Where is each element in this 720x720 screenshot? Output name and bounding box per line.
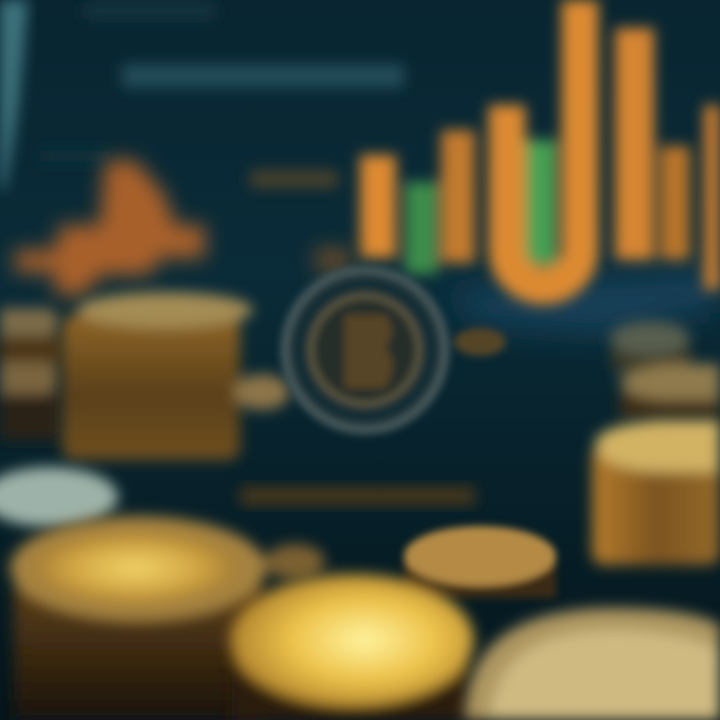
coin: pale left — [0, 467, 118, 527]
icon: central coin — [285, 270, 506, 430]
candlestick chart: left — [15, 160, 350, 295]
bar chart: right — [360, 0, 720, 290]
coin: bright lower centre — [230, 574, 474, 720]
coin: small centre right — [404, 526, 556, 598]
coin: large lower left — [10, 516, 325, 720]
coin: large lower right — [465, 608, 720, 720]
coin stack: left edge — [0, 308, 62, 440]
coin stack: right upper — [610, 321, 720, 417]
left edge light panel — [0, 0, 28, 190]
coin stack: left centre — [62, 292, 290, 460]
blurred caption — [240, 486, 475, 506]
coin stack: right lower — [592, 420, 720, 565]
blurred heading lines — [40, 3, 404, 188]
chart baseline glow — [440, 270, 720, 335]
